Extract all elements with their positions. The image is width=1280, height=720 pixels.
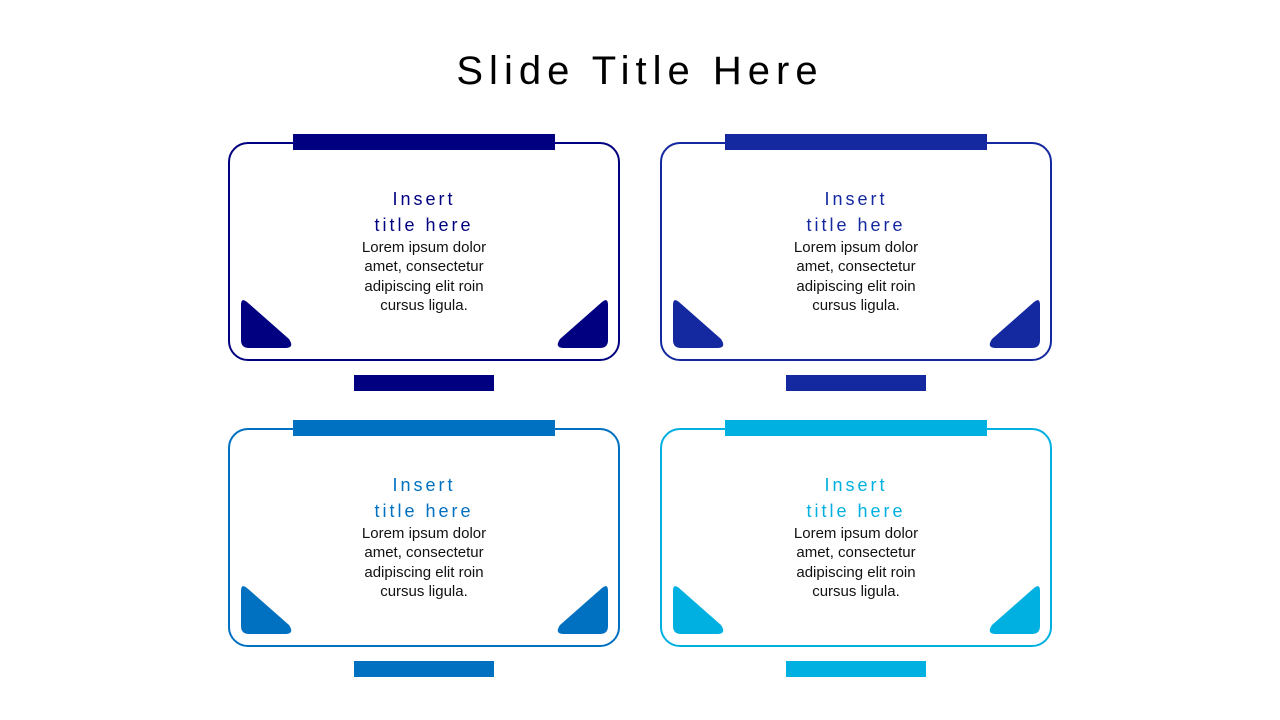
text block: title here <box>374 215 474 235</box>
bottom bar <box>786 661 926 677</box>
frame box <box>228 142 620 361</box>
text block: Insert <box>392 189 456 209</box>
text block: amet, consectetur <box>796 544 916 561</box>
icon: right triangle <box>990 586 1040 634</box>
frame box <box>660 142 1052 361</box>
text block: amet, consectetur <box>796 258 916 275</box>
icon: left triangle <box>673 586 724 634</box>
text block: adipiscing elit roin <box>796 278 916 295</box>
text block: cursus ligula. <box>812 297 900 314</box>
icon: right triangle <box>558 586 608 634</box>
top bar <box>725 134 987 150</box>
text block <box>794 189 918 314</box>
panel: bottom-right <box>660 420 1052 677</box>
top bar <box>293 420 555 436</box>
panel: bottom-left <box>228 420 620 677</box>
text block: Insert <box>824 189 888 209</box>
text block <box>794 475 918 600</box>
text block: cursus ligula. <box>380 583 468 600</box>
title: Slide Title Here <box>456 49 824 93</box>
text block: title here <box>374 501 474 521</box>
text block: amet, consectetur <box>364 258 484 275</box>
icon: left triangle <box>241 300 292 348</box>
text block: Lorem ipsum dolor <box>362 525 486 542</box>
text block: cursus ligula. <box>812 583 900 600</box>
top bar <box>293 134 555 150</box>
icon: left triangle <box>673 300 724 348</box>
bottom bar <box>354 661 494 677</box>
text block: Lorem ipsum dolor <box>794 239 918 256</box>
bottom bar <box>354 375 494 391</box>
text block: Insert <box>392 475 456 495</box>
frame box <box>228 428 620 647</box>
text block: Lorem ipsum dolor <box>362 239 486 256</box>
text block: amet, consectetur <box>364 544 484 561</box>
text block <box>362 189 486 314</box>
text block: adipiscing elit roin <box>364 278 484 295</box>
bottom bar <box>786 375 926 391</box>
frame box <box>660 428 1052 647</box>
text block: title here <box>806 501 906 521</box>
icon: left triangle <box>241 586 292 634</box>
text block: cursus ligula. <box>380 297 468 314</box>
icon: right triangle <box>558 300 608 348</box>
text block: Insert <box>824 475 888 495</box>
top bar <box>725 420 987 436</box>
text block: Lorem ipsum dolor <box>794 525 918 542</box>
text block: adipiscing elit roin <box>796 564 916 581</box>
panel: top-left <box>228 134 620 391</box>
text block: title here <box>806 215 906 235</box>
icon: right triangle <box>990 300 1040 348</box>
text block <box>362 475 486 600</box>
panel: top-right <box>660 134 1052 391</box>
text block: adipiscing elit roin <box>364 564 484 581</box>
